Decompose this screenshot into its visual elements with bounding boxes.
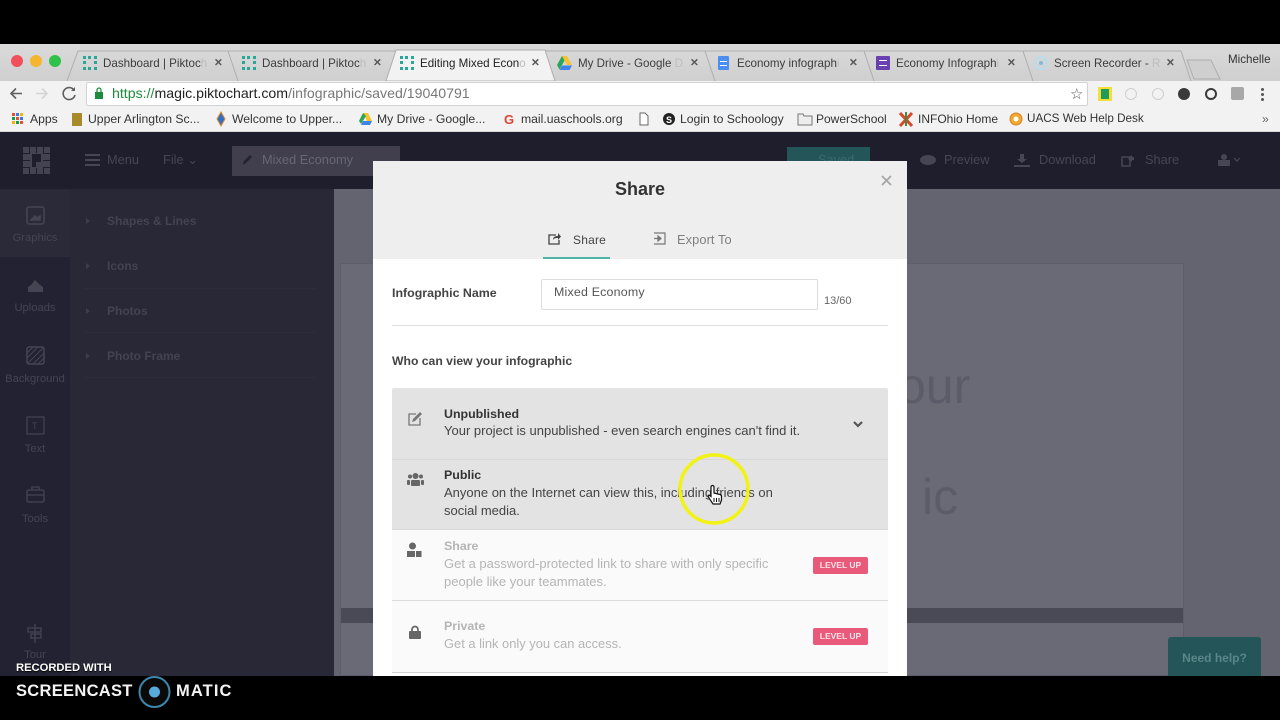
option: unpublished: Unpublished [444,407,519,421]
tab titles: Economy Infographi [896,57,999,70]
logo [23,147,50,174]
option: share: LEVEL UP [820,560,861,570]
menu icon [85,154,100,166]
name field [232,146,400,176]
left icon rail: Graphics [13,232,57,244]
bookmarks bar: Welcome to Upper... [232,112,342,126]
app top nav: Download [1039,152,1096,167]
dialog header [373,161,907,259]
tab titles: ✕ [690,57,699,69]
option: share: people like your teammates. [444,574,607,589]
name input [541,279,818,310]
option: public: social media. [444,503,520,518]
bookmark icons: S [666,115,672,125]
accordion: photo frame: Photo Frame [107,349,180,363]
option: public: Anyone on the Internet can view this, including friends on [444,485,773,500]
icon: text: T [32,421,38,431]
tab titles: Dashboard | Piktoch [262,57,366,70]
option: unpublished [392,388,888,459]
icon: background [26,346,45,365]
bookmarks bar: INFOhio Home [918,112,998,126]
infographic name label: Infographic Name [392,286,497,300]
tab titles: Dashboard | Piktoch [103,57,207,70]
tab titles: ✕ [373,57,382,69]
bottom letterbox [0,676,1280,720]
bookmark labels: Apps [30,112,58,126]
tab titles: ✕ [531,57,540,69]
left icon rail: Tour [24,649,46,661]
option: private [392,601,888,673]
nav buttons [10,86,76,100]
app top nav: File ⌄ [163,152,198,167]
browser tabs [66,50,1221,81]
tab titles: Economy infographi [737,57,839,70]
dialog title: Share [615,179,665,199]
icon: graphics [26,206,45,225]
app top nav [0,132,1280,189]
bookmark icons: G [504,112,514,127]
address bar [86,82,1088,106]
need help button: Need help? [1182,651,1247,665]
bookmarks bar: PowerSchool [816,112,887,126]
accordion: photos: Photos [107,304,148,318]
star icon: ☆ [1070,86,1083,103]
tab titles: My Drive - Google D [578,57,683,70]
tab: export to: Export To [677,232,732,247]
bookmarks bar: UACS Web Help Desk [1027,112,1144,125]
extension icons [1098,87,1264,101]
character count: 13/60 [824,295,852,307]
screencast-o-matic logo: SCREENCAST [16,682,133,700]
tab: share: Share [573,233,606,247]
app top nav: Saved [818,152,854,167]
share dialog [373,161,907,676]
icon: uploads [28,280,43,292]
tab strip [0,44,1280,81]
app top nav: Share [1145,152,1179,167]
tab: share [543,223,610,259]
window controls [11,55,61,67]
left icon rail: Uploads [14,302,56,314]
bookmarks bar: » [1262,112,1269,126]
accordion: shapes and lines: Shapes & Lines [107,214,196,228]
left icon rail: Background [5,373,65,385]
app top nav: Mixed Economy [262,152,353,167]
bookmarks bar: mail.uaschools.org [521,112,623,126]
infographic canvas: ic [922,469,958,525]
top letterbox [0,0,1280,44]
app top nav: Menu [107,152,139,167]
tab titles: Screen Recorder - R [1054,57,1160,70]
screencast-o-matic logo [16,676,233,708]
cursor highlight [678,453,750,525]
left icon rail [0,189,70,676]
option: share [392,529,888,601]
tab titles: ✕ [1007,57,1016,69]
tab titles [103,53,1271,70]
recorded with watermark: RECORDED WITH [16,662,112,674]
left icon rail: Tools [22,513,48,525]
bookmarks bar: Login to Schoology [680,112,784,126]
graphics panel [70,189,334,676]
need help button [1168,637,1261,676]
share dialog: Mixed Economy [554,285,645,299]
browser toolbar [0,81,1280,107]
icon: text [26,416,44,434]
left icon rail: Text [25,443,45,455]
bookmarks bar [0,107,1280,132]
option: unpublished: Your project is unpublished - even search engines can't find it. [444,423,800,438]
option: public [392,459,888,529]
icon: tools [26,486,45,502]
bookmark icons [12,111,1022,127]
accordion: icons: Icons [107,259,138,273]
tab titles: Michelle [1228,53,1271,66]
screencast-o-matic logo: MATIC [176,682,233,700]
hand cursor [707,484,722,505]
close icon [882,176,892,186]
option: share: Get a password-protected link to share with only specific [444,556,768,571]
option: private: Private [444,619,485,633]
url: https://magic.piktochart.com/infographic/saved/19040791 [112,85,470,101]
option: private: Get a link only you can access. [444,636,622,651]
top actions: Preview [944,152,990,167]
active graphics tab [0,189,70,257]
padlock [95,87,103,99]
options list [392,388,888,673]
tab titles: ✕ [849,57,858,69]
bookmarks bar: My Drive - Google... [377,112,485,126]
option: share: Share [444,539,478,553]
tab titles: ✕ [1166,57,1175,69]
who can view heading: Who can view your infographic [392,354,572,368]
option: private: LEVEL UP [820,631,861,641]
saved button [787,147,870,172]
canvas heading fragments: our [898,358,970,414]
icon: tour [27,624,42,643]
infographic canvas [340,263,1184,676]
tab titles: ✕ [214,57,223,69]
option: public: Public [444,468,481,482]
tab titles: Editing Mixed Econo [420,57,526,70]
bookmarks bar: Upper Arlington Sc... [88,112,200,126]
